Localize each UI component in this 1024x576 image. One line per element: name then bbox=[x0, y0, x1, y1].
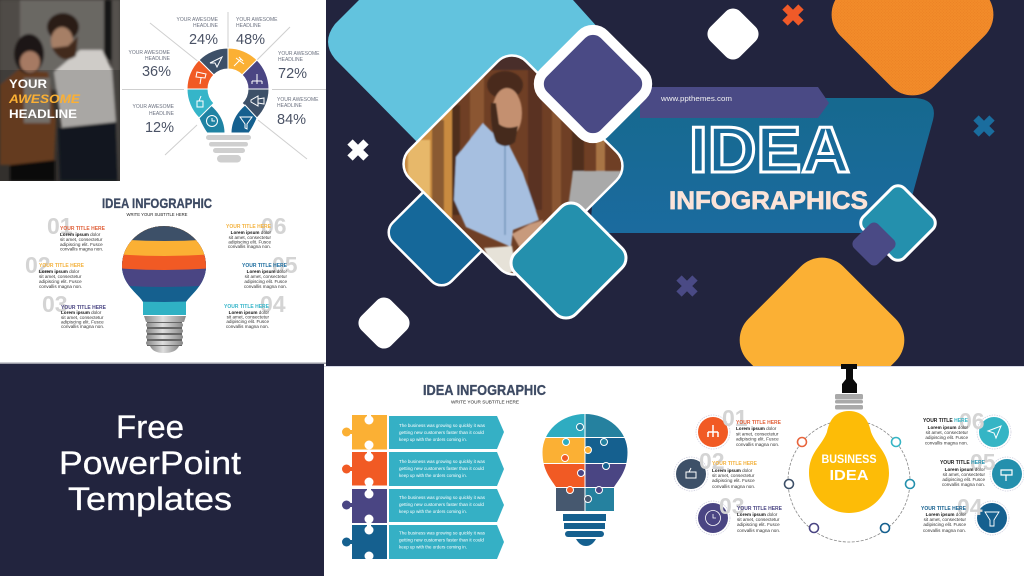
item 04: Lorem ipsum dolor bbox=[926, 512, 966, 517]
white diamond lower left bbox=[354, 293, 414, 353]
icon: thumbs up bbox=[674, 457, 708, 491]
item 04: adipiscing elit. Fusce bbox=[226, 319, 269, 324]
stat 36%: HEADLINE bbox=[145, 56, 171, 62]
icon: paper plane bbox=[977, 415, 1011, 449]
laptop bbox=[568, 170, 620, 210]
item 03 bbox=[42, 291, 107, 329]
stat 72%: HEADLINE bbox=[278, 57, 304, 63]
shirt bbox=[454, 123, 539, 247]
item 06: 06 bbox=[959, 408, 985, 434]
heading: IDEA INFOGRAPHIC bbox=[102, 195, 212, 211]
stat 24%: HEADLINE bbox=[193, 23, 219, 29]
item 02: sit amet, consectetur bbox=[39, 274, 82, 279]
item 03: Lorem ipsum dolor bbox=[737, 512, 777, 517]
headline text: AWESOME bbox=[8, 92, 81, 106]
orange x bbox=[785, 7, 801, 23]
item 03: YOUR TITLE HERE bbox=[61, 305, 107, 311]
text arrow 2: getting new customers faster than it could bbox=[399, 466, 485, 471]
title: IDEA: IDEA bbox=[689, 113, 850, 186]
headline text: HEADLINE bbox=[9, 107, 77, 121]
panel: striped bulb slide bbox=[0, 182, 326, 364]
heading: IDEA INFOGRAPHIC bbox=[423, 383, 546, 399]
icon: funnel bbox=[975, 501, 1009, 535]
photo: two people bbox=[0, 0, 120, 181]
item 02: sit amet, consectetur bbox=[712, 473, 755, 478]
caption line 3: Templates bbox=[68, 481, 232, 517]
panel: awesome headline slide bbox=[0, 0, 326, 182]
puzzle row 4 bbox=[342, 523, 387, 560]
item 02: convallis magna non. bbox=[39, 284, 82, 289]
item 05: sit amet, consectetur bbox=[245, 274, 287, 279]
stat 84% bbox=[277, 97, 319, 128]
blue x bbox=[976, 118, 992, 134]
lamp collar bbox=[835, 394, 863, 410]
panel: hero banner bbox=[326, 0, 1024, 366]
item 01 bbox=[722, 405, 782, 447]
panel: business idea slide bbox=[666, 364, 1024, 576]
stat 12%: HEADLINE bbox=[149, 111, 175, 117]
hand bbox=[512, 220, 543, 248]
panel: puzzle infographic slide bbox=[324, 366, 666, 576]
puzzle row 3 bbox=[342, 487, 387, 524]
item 06: convallis magna non. bbox=[228, 244, 271, 249]
item 04 bbox=[921, 494, 983, 533]
headline text: YOUR bbox=[9, 77, 47, 91]
item 06: 06 bbox=[261, 213, 287, 239]
item 06: convallis magna non. bbox=[925, 440, 968, 446]
item 05: adipiscing elit. Fusce bbox=[942, 477, 985, 482]
item 01: adipiscing elit. Fusce bbox=[60, 242, 103, 247]
item 01: convallis magna non. bbox=[60, 246, 103, 252]
item 04: adipiscing elit. Fusce bbox=[923, 522, 966, 527]
text arrow 4: keep up with the orders coming in. bbox=[399, 544, 467, 550]
photo: man at laptop bbox=[404, 56, 622, 274]
item 02 bbox=[25, 252, 85, 289]
item 03: adipiscing elit. Fusce bbox=[61, 320, 104, 324]
item 06: Lorem ipsum dolor bbox=[928, 425, 968, 430]
url text: www.ppthemes.com bbox=[660, 94, 732, 103]
photo frame bbox=[395, 47, 631, 283]
ring icons bbox=[196, 57, 264, 129]
small purple diamond bbox=[850, 220, 898, 268]
item 02: 02 bbox=[699, 448, 725, 474]
stat 12%: YOUR AWESOME bbox=[132, 104, 175, 110]
puzzle row 2 bbox=[342, 450, 387, 486]
white diamond top bbox=[703, 4, 763, 64]
stat 84%: YOUR AWESOME bbox=[277, 97, 319, 103]
item 01: Lorem ipsum dolor bbox=[736, 426, 776, 431]
item 04: Lorem ipsum dolor bbox=[229, 310, 269, 315]
item 01: 01 bbox=[722, 405, 748, 431]
item 02: convallis magna non. bbox=[712, 484, 755, 489]
orbit rings bbox=[784, 438, 914, 532]
item 06 bbox=[226, 213, 287, 249]
item 05: YOUR TITLE HERE bbox=[242, 263, 288, 269]
subtitle: WRITE YOUR SUBTITLE HERE bbox=[126, 212, 188, 217]
item 05: Lorem ipsum dolor bbox=[247, 269, 287, 274]
blue diamond lower left bbox=[383, 183, 491, 291]
item 01: convallis magna non. bbox=[736, 442, 779, 447]
icon: paint roller bbox=[990, 457, 1024, 491]
radial lines bbox=[122, 12, 326, 159]
woman bbox=[0, 70, 56, 165]
item 05: YOUR TITLE HERE bbox=[940, 460, 986, 466]
stat 84%: HEADLINE bbox=[277, 103, 303, 109]
item 03 bbox=[719, 493, 783, 533]
caption line 2: PowerPoint bbox=[59, 445, 241, 481]
stat 12% bbox=[132, 104, 175, 136]
stat 24%: YOUR AWESOME bbox=[176, 17, 219, 23]
item 01: YOUR TITLE HERE bbox=[60, 226, 106, 232]
stat 36% bbox=[128, 50, 171, 80]
item 03: sit amet, consectetur bbox=[61, 315, 104, 320]
item 02: adipiscing elit. Fusce bbox=[39, 279, 82, 284]
puzzle bulb bbox=[540, 410, 630, 546]
bulb text: BUSINESS bbox=[822, 454, 877, 466]
text arrow 3: getting new customers faster than it could bbox=[399, 502, 485, 507]
item 04: sit amet, consectetur bbox=[227, 314, 269, 320]
stat 48%: HEADLINE bbox=[236, 23, 262, 29]
item 03: sit amet, consectetur bbox=[737, 517, 780, 522]
stat 72%: YOUR AWESOME bbox=[278, 51, 320, 57]
item 06: adipiscing elit. Fusce bbox=[925, 435, 968, 440]
item 03: 03 bbox=[719, 493, 745, 519]
stat 72% bbox=[278, 51, 320, 82]
item 04: 04 bbox=[260, 291, 286, 317]
light blue large diamond bbox=[328, 0, 600, 145]
stat 12%: 12% bbox=[145, 120, 174, 136]
item 01: 01 bbox=[47, 213, 73, 239]
item 05: sit amet, consectetur bbox=[943, 472, 985, 477]
blue title ribbon bbox=[590, 98, 934, 233]
bulb text bbox=[822, 454, 877, 484]
item 03: YOUR TITLE HERE bbox=[737, 506, 783, 512]
text arrow 4: getting new customers faster than it could bbox=[399, 538, 485, 542]
text arrow 1: keep up with the orders coming in. bbox=[399, 437, 467, 442]
item 03: adipiscing elit. Fusce bbox=[737, 522, 780, 527]
item 04: 04 bbox=[957, 494, 983, 520]
stat 72%: 72% bbox=[278, 66, 307, 82]
item 05: 05 bbox=[970, 449, 996, 475]
item 02: YOUR TITLE HERE bbox=[712, 461, 758, 467]
item 01: YOUR TITLE HERE bbox=[736, 420, 782, 426]
stat 84%: 84% bbox=[277, 112, 306, 128]
item 05: convallis magna non. bbox=[244, 284, 287, 289]
item 03: Lorem ipsum dolor bbox=[61, 310, 101, 315]
white x bbox=[350, 142, 366, 158]
item 02: Lorem ipsum dolor bbox=[39, 269, 79, 274]
text arrow 2: keep up with the orders coming in. bbox=[399, 473, 467, 478]
text arrow 2: The business was growing so quickly it was bbox=[399, 459, 486, 464]
panel: free templates caption bbox=[0, 364, 324, 576]
item 03: convallis magna non. bbox=[61, 324, 104, 329]
teal diamond bbox=[505, 197, 632, 324]
small teal diamond bbox=[857, 182, 939, 264]
yellow bulb bbox=[809, 411, 889, 513]
item 02: Lorem ipsum dolor bbox=[712, 468, 752, 473]
item 03: convallis magna non. bbox=[737, 528, 780, 533]
caption line 1: Free bbox=[116, 409, 184, 445]
item 02: adipiscing elit. Fusce bbox=[712, 478, 755, 483]
item 05 bbox=[940, 449, 996, 487]
subtitle: WRITE YOUR SUBTITLE HERE bbox=[451, 400, 519, 406]
bulb base bars bbox=[206, 135, 251, 162]
item 04: sit amet, consectetur bbox=[924, 517, 966, 522]
item 01: sit amet, consectetur bbox=[60, 237, 103, 242]
item 01: sit amet, consectetur bbox=[736, 432, 779, 436]
item 06: YOUR TITLE HERE bbox=[923, 418, 969, 424]
headline text bbox=[8, 77, 81, 121]
item 06: Lorem ipsum dolor bbox=[231, 230, 271, 235]
stat 48%: 48% bbox=[236, 32, 265, 48]
stat 48% bbox=[236, 17, 278, 48]
lamp cord bbox=[841, 364, 857, 393]
text arrow 2 bbox=[389, 452, 504, 486]
item 06 bbox=[923, 408, 985, 446]
icon: clock bbox=[696, 501, 730, 535]
item 04: convallis magna non. bbox=[226, 324, 269, 329]
bulb text: IDEA bbox=[830, 467, 869, 484]
item 04: convallis magna non. bbox=[923, 528, 966, 533]
papers bbox=[483, 245, 514, 273]
puzzle row 1 bbox=[342, 414, 387, 450]
item 05: 05 bbox=[272, 252, 298, 278]
text arrow 4 bbox=[389, 525, 504, 559]
item 03: 03 bbox=[42, 291, 68, 317]
title: INFOGRAPHICS: INFOGRAPHICS bbox=[669, 187, 868, 215]
item 05: convallis magna non. bbox=[942, 482, 985, 487]
text arrow 1 bbox=[389, 416, 504, 449]
stat 36%: 36% bbox=[142, 64, 171, 80]
text arrow 3: The business was growing so quickly it was bbox=[399, 495, 486, 500]
purple diamond bbox=[532, 23, 654, 145]
purple url tab bbox=[640, 87, 829, 118]
head bbox=[487, 71, 523, 99]
item 06: adipiscing elit. Fusce bbox=[228, 240, 271, 244]
item 04: YOUR TITLE HERE bbox=[224, 304, 270, 310]
purple x bbox=[679, 278, 695, 294]
bulb ring segments bbox=[187, 48, 269, 133]
item 02: 02 bbox=[25, 252, 51, 278]
yellow diamond bbox=[727, 245, 917, 435]
item 02 bbox=[699, 448, 758, 489]
item 04 bbox=[224, 291, 286, 329]
stat 36%: YOUR AWESOME bbox=[128, 50, 171, 56]
item 05: Lorem ipsum dolor bbox=[945, 467, 985, 472]
item 01: Lorem ipsum dolor bbox=[60, 232, 100, 237]
item 01 bbox=[47, 213, 106, 252]
item 06: YOUR TITLE HERE bbox=[226, 224, 272, 230]
item 05: adipiscing elit. Fusce bbox=[244, 279, 287, 284]
item 01: adipiscing elit. Fusce bbox=[736, 436, 779, 442]
text arrow 3: keep up with the orders coming in. bbox=[399, 509, 467, 514]
slide bottom edge bbox=[0, 362, 326, 364]
stat 24% bbox=[176, 17, 219, 48]
man bbox=[54, 50, 116, 130]
stat 24%: 24% bbox=[189, 32, 218, 48]
text arrow 3 bbox=[389, 489, 504, 522]
dashed orbit bbox=[788, 420, 910, 542]
striped bulb bbox=[122, 226, 206, 315]
text arrow 1: The business was growing so quickly it was bbox=[399, 423, 486, 428]
item 05 bbox=[242, 252, 298, 289]
icon: hierarchy bbox=[696, 415, 730, 449]
bulb screw base bbox=[144, 316, 186, 353]
item 02: YOUR TITLE HERE bbox=[39, 263, 85, 269]
orange textured diamond bbox=[819, 0, 1006, 108]
text arrow 1: getting new customers faster than it could bbox=[399, 430, 485, 435]
item 04: YOUR TITLE HERE bbox=[921, 506, 967, 512]
stat 48%: YOUR AWESOME bbox=[236, 17, 278, 23]
text arrow 4: The business was growing so quickly it was bbox=[399, 530, 486, 536]
item 06: sit amet, consectetur bbox=[926, 430, 968, 435]
item 06: sit amet, consectetur bbox=[229, 235, 271, 240]
